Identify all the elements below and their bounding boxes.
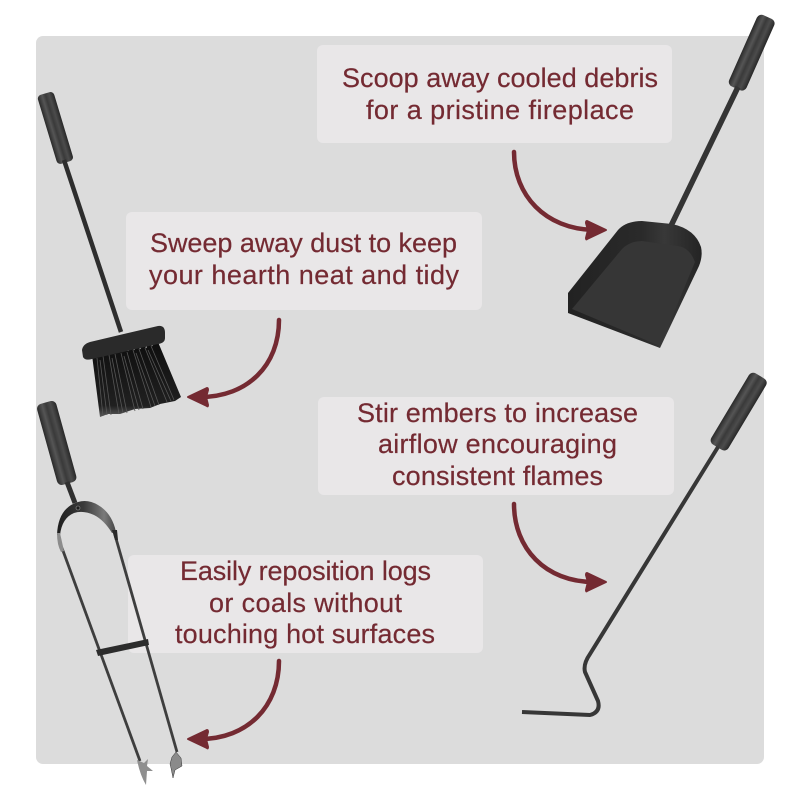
- arrow: to tongs: [188, 661, 279, 748]
- callout: poker: consistent flames: [392, 461, 603, 491]
- callout: shovel: Scoop away cooled debris: [342, 63, 658, 93]
- shovel handle: [727, 13, 776, 92]
- arrow: to shovel: [514, 152, 606, 239]
- shovel floor: [572, 241, 695, 346]
- broom bristles: [92, 341, 181, 417]
- callout: shovel: [317, 45, 672, 143]
- shovel body: [568, 221, 702, 348]
- tongs right rivet plate: [112, 530, 118, 540]
- callout: tongs: touching hot surfaces: [175, 619, 435, 649]
- tongs rod: [67, 482, 75, 503]
- tongs right leg: [115, 535, 177, 752]
- broom head: [82, 326, 165, 360]
- callout: tongs: or coals without: [209, 588, 402, 618]
- callout: tongs: [128, 555, 483, 653]
- tongs left leg: [62, 548, 140, 761]
- tongs left rivet plate: [57, 533, 64, 552]
- tongs left fork: [137, 759, 153, 785]
- tool: broom: [37, 91, 181, 417]
- poker handle: [709, 371, 769, 452]
- callout: shovel: for a pristine fireplace: [366, 95, 634, 125]
- callout: poker: airflow encouraging: [378, 429, 617, 459]
- callout: tongs: Easily reposition logs: [180, 556, 431, 586]
- tongs arch: [57, 501, 116, 535]
- broom handle: [37, 91, 74, 165]
- tool: shovel: [568, 13, 776, 348]
- callout: broom: Sweep away dust to keep: [150, 228, 457, 258]
- arrow: to broom: [188, 320, 279, 406]
- tool: poker: [522, 371, 769, 715]
- tongs crossbar: [96, 639, 149, 656]
- tongs handle: [36, 400, 78, 486]
- callout: broom: your hearth neat and tidy: [149, 260, 460, 290]
- tool: tongs: [36, 400, 182, 785]
- poker rod and hook: [522, 447, 718, 715]
- shovel rod: [668, 87, 738, 232]
- arrow: to poker: [514, 504, 606, 591]
- tongs right fork: [170, 752, 182, 778]
- tongs pivot screw: [76, 506, 80, 510]
- broom rod: [64, 160, 121, 332]
- callout: broom: [126, 212, 482, 310]
- callout: poker: Stir embers to increase: [357, 398, 638, 428]
- callout: poker: [318, 397, 674, 495]
